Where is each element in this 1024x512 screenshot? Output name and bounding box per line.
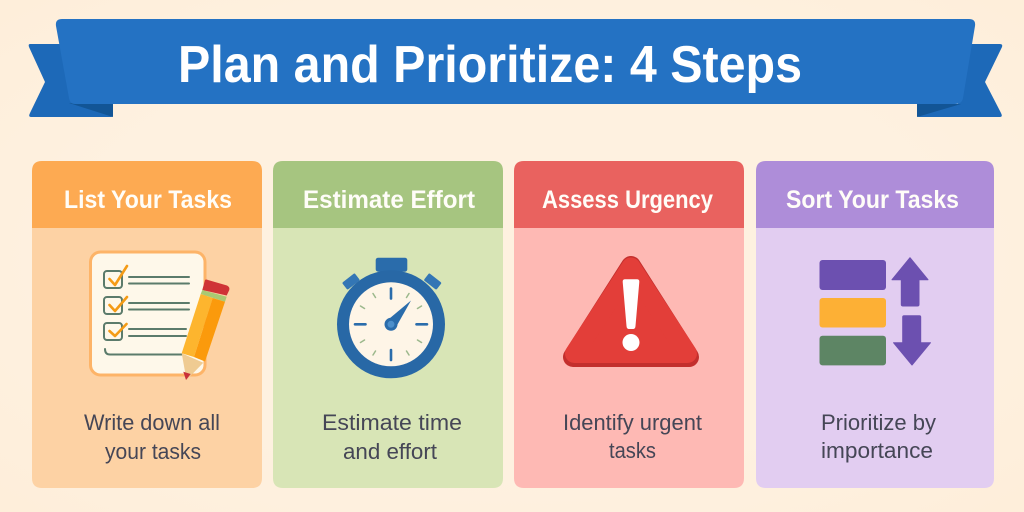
icon: stopwatch xyxy=(337,258,445,378)
bars xyxy=(820,260,886,290)
card header xyxy=(756,161,994,228)
heading: List Your Tasks xyxy=(64,186,232,214)
triangle xyxy=(574,267,688,354)
side buttons xyxy=(342,273,442,290)
hand xyxy=(386,300,411,328)
panel: assess urgency xyxy=(514,161,744,488)
heading: Sort Your Tasks xyxy=(786,186,959,214)
description: Estimate time xyxy=(322,410,462,435)
description: Write down all xyxy=(84,410,220,435)
case and face xyxy=(337,270,445,378)
arrow up xyxy=(892,258,928,306)
check marks xyxy=(110,266,127,336)
triangle shadow xyxy=(573,266,689,357)
title: Plan and Prioritize: 4 Steps xyxy=(178,36,802,94)
description xyxy=(563,410,702,463)
heading: Estimate Effort xyxy=(303,186,476,214)
panel: estimate effort xyxy=(273,161,503,488)
description xyxy=(821,410,936,463)
pencil xyxy=(182,280,229,380)
icon: sort bars and arrows xyxy=(820,258,930,365)
card header xyxy=(514,161,744,228)
title banner xyxy=(29,19,1002,117)
ribbon fold right xyxy=(917,104,961,117)
card body xyxy=(32,228,262,488)
description: Prioritize by xyxy=(821,410,936,435)
card header xyxy=(32,161,262,228)
panel: sort your tasks xyxy=(756,161,994,488)
description: tasks xyxy=(609,438,656,463)
description: and effort xyxy=(343,439,437,464)
ribbon fold left xyxy=(69,103,113,117)
card body xyxy=(756,228,994,488)
crown xyxy=(376,258,407,272)
ribbon main band xyxy=(56,19,975,104)
minor ticks xyxy=(360,294,422,355)
description xyxy=(322,410,462,464)
icon: warning triangle xyxy=(573,266,689,357)
checklist rows xyxy=(104,271,189,354)
icon: checklist with pencil xyxy=(90,252,229,380)
card body xyxy=(273,228,503,488)
description xyxy=(84,410,220,464)
heading: Assess Urgency xyxy=(542,186,713,214)
ribbon tail right xyxy=(917,44,1002,117)
major ticks xyxy=(355,288,427,360)
exclamation dot xyxy=(622,334,640,351)
description: importance xyxy=(821,438,933,463)
arrow down xyxy=(894,316,930,365)
card header xyxy=(273,161,503,228)
paper xyxy=(90,252,205,375)
card body xyxy=(514,228,744,488)
description: your tasks xyxy=(105,439,201,464)
description: Identify urgent xyxy=(563,410,702,435)
exclamation bar xyxy=(623,279,639,329)
ribbon tail left xyxy=(29,44,113,117)
panel: list your tasks xyxy=(32,161,262,488)
